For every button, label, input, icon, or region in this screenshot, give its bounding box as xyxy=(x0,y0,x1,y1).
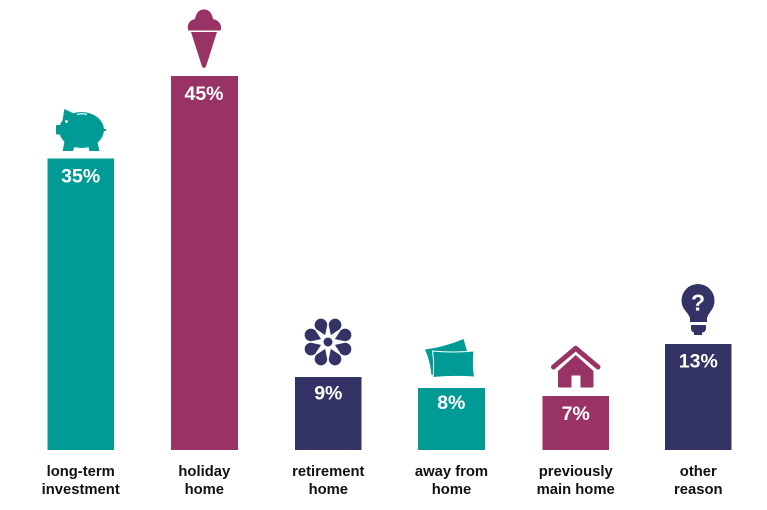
label: retirement home: retirement xyxy=(292,464,364,480)
label: long-term investment: long-term xyxy=(47,464,115,480)
label: previously main home: main home xyxy=(537,482,615,498)
column: retirement home xyxy=(292,377,365,498)
icon: piggy bank xyxy=(56,109,106,151)
label: other reason: other xyxy=(680,464,717,480)
value: 13%: 13% xyxy=(679,351,718,373)
value: 45%: 45% xyxy=(184,83,224,105)
icon: ice cream cone xyxy=(188,10,221,68)
bar: 13% xyxy=(665,344,732,450)
column: holiday home xyxy=(171,76,238,498)
label: retirement home: home xyxy=(309,482,348,498)
icon: light bulb with question mark: ? xyxy=(691,290,705,316)
label: other reason: reason xyxy=(674,482,723,498)
value: 9%: 9% xyxy=(314,382,342,404)
icon: house xyxy=(554,348,598,388)
bar: 8% xyxy=(418,388,485,450)
value: 8%: 8% xyxy=(437,392,465,414)
column: long-term investment xyxy=(42,158,120,498)
label: previously main home: previously xyxy=(539,464,613,480)
bar: 45% xyxy=(171,76,238,450)
column: previously main home xyxy=(537,396,615,498)
bar: 9% xyxy=(295,377,362,450)
column: away from home xyxy=(415,388,488,498)
bar: 35% xyxy=(48,158,114,450)
icon: light bulb with question mark xyxy=(682,284,714,335)
column: other reason xyxy=(665,344,732,498)
label: away from home: away from xyxy=(415,464,488,480)
label: away from home: home xyxy=(432,482,471,498)
value: 7%: 7% xyxy=(562,403,590,425)
value: 35%: 35% xyxy=(61,166,100,188)
bar: 7% xyxy=(542,396,609,450)
label: long-term investment: investment xyxy=(42,482,120,498)
label: holiday home: home xyxy=(185,482,224,498)
icon: flower xyxy=(303,317,353,367)
icon: pillows xyxy=(425,339,474,378)
label: holiday home: holiday xyxy=(178,464,230,480)
